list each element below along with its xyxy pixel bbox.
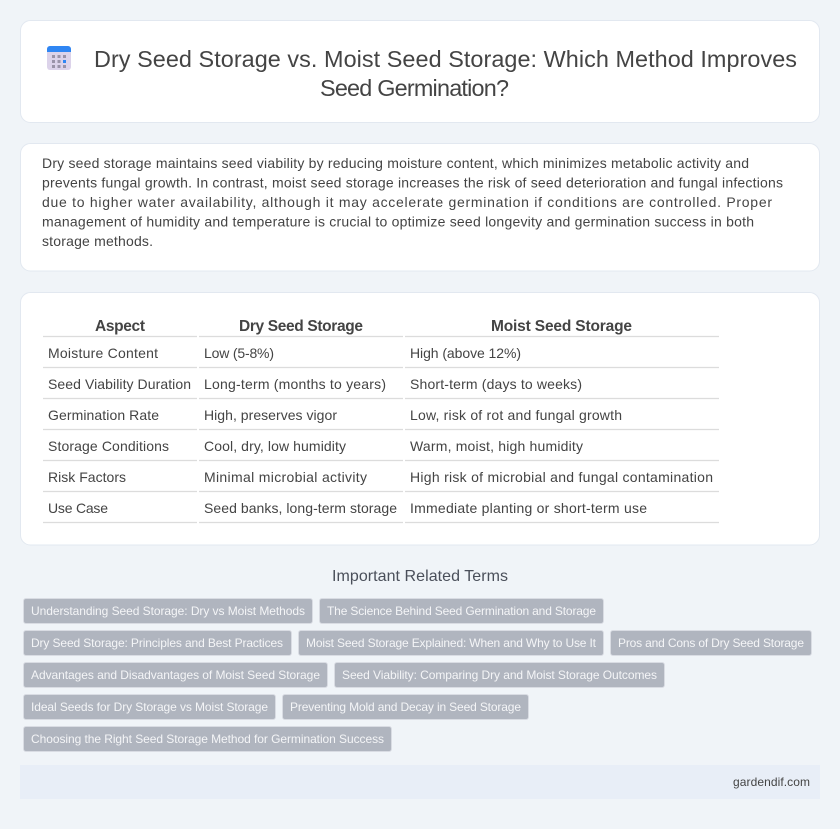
tag <box>282 694 528 720</box>
row: use case: Use Case <box>48 500 108 516</box>
row: germination rate <box>48 407 622 423</box>
icon: calendar <box>47 46 71 70</box>
tag: Preventing Mold and Decay in Seed Storage <box>290 700 521 714</box>
tag: Choosing the Right Seed Storage Method for Germination Success <box>31 732 384 746</box>
tag: Understanding Seed Storage: Dry vs Moist Methods <box>31 604 305 618</box>
row: risk factors: High risk of microbial and fungal contamination <box>410 469 713 485</box>
row: seed viability duration: Seed Viability Duration <box>48 376 191 392</box>
tag <box>24 694 276 720</box>
heading: related terms: Important Related Terms <box>332 568 508 585</box>
row: germination rate: High, preserves vigor <box>204 407 337 423</box>
text block: description: storage methods. <box>42 233 153 249</box>
tag: Dry Seed Storage: Principles and Best Practices <box>31 636 283 650</box>
tag: Moist Seed Storage Explained: When and Why to Use It <box>306 636 597 650</box>
tag <box>24 630 292 656</box>
panel: header <box>20 20 820 122</box>
text block: description: due to higher water availability, although it may accelerate germination if conditions are controlled. Proper <box>42 194 772 210</box>
row: storage conditions: Warm, moist, high humidity <box>410 438 583 454</box>
row: moisture content: Moisture Content <box>48 345 158 361</box>
tag: Ideal Seeds for Dry Storage vs Moist Storage <box>31 700 268 714</box>
text block: description: prevents fungal growth. In contrast, moist seed storage increases the risk of seed deterioration and fungal infections <box>42 174 783 190</box>
row: seed viability duration <box>48 376 582 392</box>
row: use case <box>48 500 647 516</box>
table header <box>95 318 632 335</box>
row: germination rate: Low, risk of rot and fungal growth <box>410 407 622 423</box>
row: use case: Seed banks, long-term storage <box>204 500 397 516</box>
panel: description <box>20 144 820 271</box>
table header: Aspect <box>95 318 145 335</box>
tag <box>24 662 328 688</box>
row: moisture content <box>48 345 521 361</box>
footer <box>20 765 820 799</box>
tag <box>298 630 604 656</box>
row: storage conditions <box>48 438 583 454</box>
tag <box>320 598 604 624</box>
row: seed viability duration: Long-term (months to years) <box>204 376 386 392</box>
row: risk factors <box>48 469 713 485</box>
tag <box>24 726 392 752</box>
text block: description: Dry seed storage maintains seed viability by reducing moisture content, which minimizes metabolic activity and <box>42 155 749 171</box>
tag <box>610 630 812 656</box>
title: Seed Germination? <box>320 75 509 101</box>
row: risk factors: Risk Factors <box>48 469 126 485</box>
table header: Moist Seed Storage <box>491 318 632 335</box>
row: storage conditions: Cool, dry, low humidity <box>204 438 346 454</box>
row: moisture content: High (above 12%) <box>410 345 521 361</box>
row: storage conditions: Storage Conditions <box>48 438 169 454</box>
row: seed viability duration: Short-term (days to weeks) <box>410 376 582 392</box>
tag: Seed Viability: Comparing Dry and Moist Storage Outcomes <box>342 668 657 682</box>
text block: description: management of humidity and temperature is crucial to optimize seed longevity and germination success in both <box>42 214 754 230</box>
title: Dry Seed Storage vs. Moist Seed Storage: Which Method Improves <box>94 46 797 72</box>
tag <box>334 662 664 688</box>
row: moisture content: Low (5-8%) <box>204 345 274 361</box>
tag: Pros and Cons of Dry Seed Storage <box>618 636 804 650</box>
tags: related terms <box>24 598 812 752</box>
table header: Dry Seed Storage <box>239 318 363 335</box>
panel: comparison table <box>20 292 820 545</box>
row: germination rate: Germination Rate <box>48 407 159 423</box>
footer source: gardendif.com <box>733 775 810 789</box>
tag <box>24 598 312 624</box>
row: risk factors: Minimal microbial activity <box>204 469 367 485</box>
tag: Advantages and Disadvantages of Moist Seed Storage <box>31 668 320 682</box>
row: use case: Immediate planting or short-term use <box>410 500 647 516</box>
tag: The Science Behind Seed Germination and Storage <box>327 604 596 618</box>
table row lines <box>43 336 719 522</box>
